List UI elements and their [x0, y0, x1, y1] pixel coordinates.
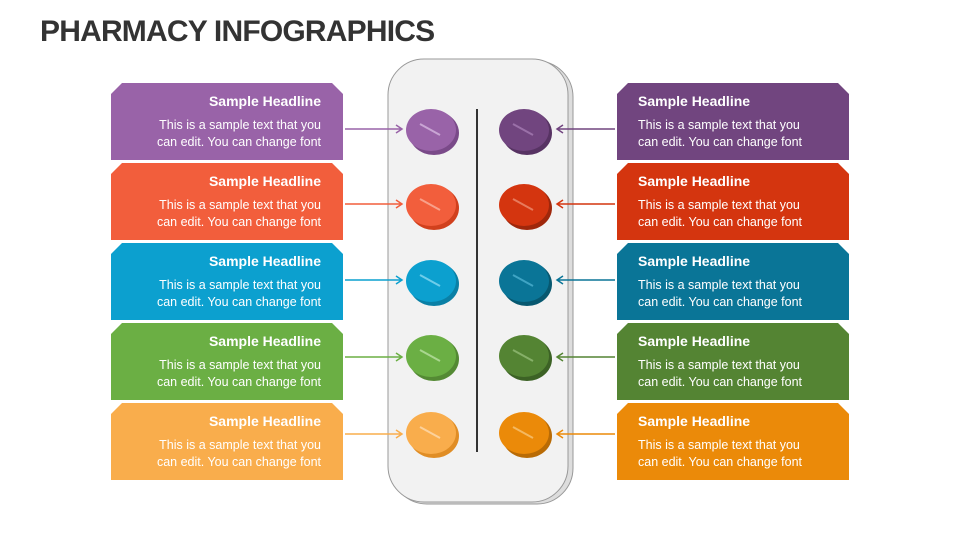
box left 1: Sample Headline	[209, 93, 321, 109]
box right 4: can edit. You can change font	[638, 375, 802, 389]
box right 3	[617, 243, 849, 320]
box right 2	[617, 163, 849, 240]
box left 5	[111, 403, 343, 480]
box left 1	[111, 83, 343, 160]
box left 1: This is a sample text that you	[159, 118, 321, 132]
box right 1: Sample Headline	[638, 93, 750, 109]
box left 4: can edit. You can change font	[157, 375, 321, 389]
box left 4	[111, 323, 343, 400]
box right 4: This is a sample text that you	[638, 358, 800, 372]
box right 5: This is a sample text that you	[638, 438, 800, 452]
box right 4	[617, 323, 849, 400]
box left 4: This is a sample text that you	[159, 358, 321, 372]
box right 3: This is a sample text that you	[638, 278, 800, 292]
box right 5: Sample Headline	[638, 413, 750, 429]
box right 1	[617, 83, 849, 160]
box right 5: can edit. You can change font	[638, 455, 802, 469]
box left 3: Sample Headline	[209, 253, 321, 269]
box right 5	[617, 403, 849, 480]
box right 3: Sample Headline	[638, 253, 750, 269]
box left 2: can edit. You can change font	[157, 215, 321, 229]
box right 4: Sample Headline	[638, 333, 750, 349]
box right 1: This is a sample text that you	[638, 118, 800, 132]
box left 2	[111, 163, 343, 240]
box right 2: This is a sample text that you	[638, 198, 800, 212]
box right 1: can edit. You can change font	[638, 135, 802, 149]
box left 4: Sample Headline	[209, 333, 321, 349]
box left 3	[111, 243, 343, 320]
box right 3: can edit. You can change font	[638, 295, 802, 309]
box right 2: can edit. You can change font	[638, 215, 802, 229]
arrows	[345, 125, 615, 438]
box left 1: can edit. You can change font	[157, 135, 321, 149]
box left 5: This is a sample text that you	[159, 438, 321, 452]
box left 3: This is a sample text that you	[159, 278, 321, 292]
box left 3: can edit. You can change font	[157, 295, 321, 309]
box left 2: This is a sample text that you	[159, 198, 321, 212]
box right 2: Sample Headline	[638, 173, 750, 189]
box left 5: Sample Headline	[209, 413, 321, 429]
box left 5: can edit. You can change font	[157, 455, 321, 469]
box left 2: Sample Headline	[209, 173, 321, 189]
title: PHARMACY INFOGRAPHICS	[40, 15, 434, 48]
